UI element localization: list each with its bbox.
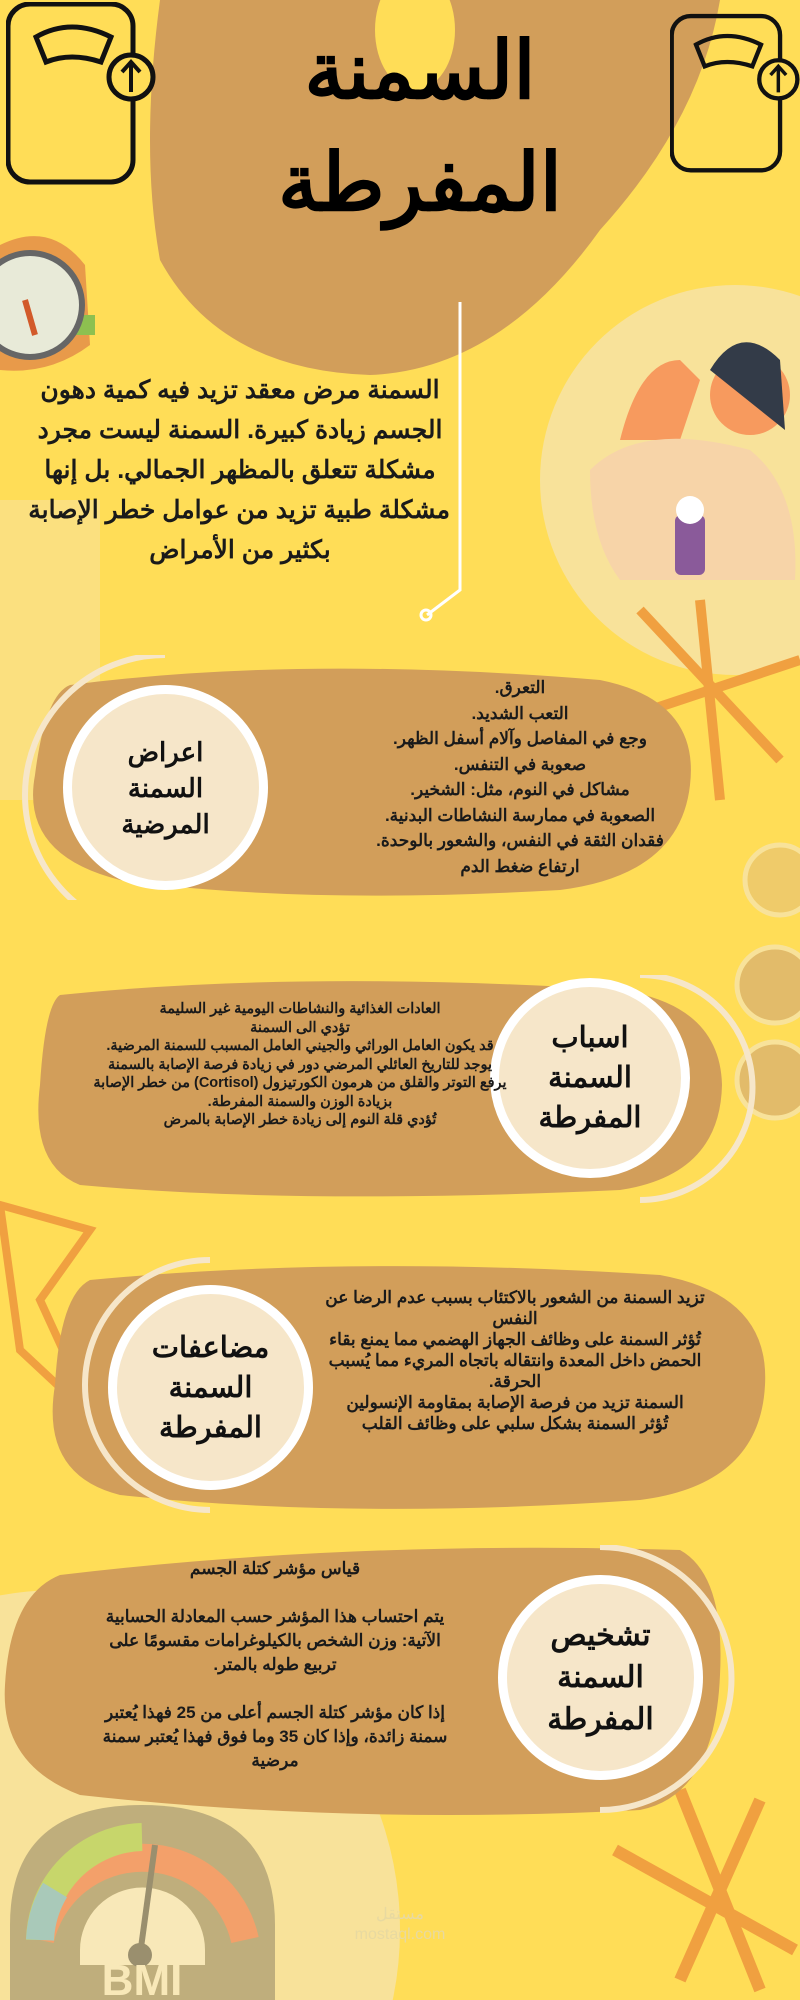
- circle: complications heading: المفرطة: [159, 1412, 262, 1444]
- icon: burger gauge: [0, 236, 95, 371]
- text: causes list: تؤدي الى السمنة: [250, 1020, 350, 1036]
- title: السمنة: [304, 26, 536, 115]
- text: symptoms list: ارتفاع ضغط الدم: [460, 856, 580, 876]
- title: المفرطة: [278, 138, 562, 227]
- circle: symptoms heading: [63, 685, 268, 890]
- text: symptoms list: صعوبة في التنفس.: [454, 754, 586, 774]
- circle: complications heading: [108, 1285, 313, 1490]
- text: diagnosis: إذا كان مؤشر كتلة الجسم أعلى من 25 فهذا يُعتبر: [105, 1703, 445, 1722]
- text: symptoms list: الصعوبة في ممارسة النشاطات البدنية.: [385, 806, 655, 824]
- text: causes list: بزيادة الوزن والسمنة المفرطة.: [208, 1094, 392, 1110]
- text: complications list: الحرقة.: [489, 1372, 541, 1391]
- text: causes list: [93, 1001, 507, 1128]
- text: diagnosis: تربيع طوله بالمتر.: [213, 1655, 337, 1674]
- circle: causes heading: [490, 978, 690, 1178]
- circle: causes heading: المفرطة: [539, 1102, 641, 1134]
- watermark: mostaql.com: [355, 1926, 445, 1943]
- text: symptoms list: التعب الشديد.: [471, 704, 569, 722]
- intro text: بكثير من الأمراض: [149, 536, 331, 564]
- text: causes list: قد يكون العامل الوراثي والجيني العامل المسبب للسمنة المرضية.: [106, 1038, 494, 1054]
- text: complications list: الحمض داخل المعدة وانتقاله باتجاه المريء مما يُسبب: [329, 1351, 701, 1370]
- connector line: [420, 302, 462, 622]
- circle: complications heading: مضاعفات: [152, 1332, 269, 1364]
- text: complications list: النفس: [492, 1309, 538, 1328]
- text: diagnosis: الآتية: وزن الشخص بالكيلوغرامات مقسومًا على: [109, 1631, 441, 1650]
- intro text: الجسم زيادة كبيرة. السمنة ليست مجرد: [38, 416, 442, 444]
- panel: diagnosis: [4, 1545, 734, 1815]
- circle: complications heading: السمنة: [169, 1372, 252, 1404]
- icon: BMI gauge: [10, 1805, 275, 2000]
- panel: symptoms: [22, 655, 691, 900]
- circle: diagnosis heading: [498, 1575, 703, 1780]
- text: diagnosis: سمنة زائدة، وإذا كان 35 وما فوق فهذا يُعتبر سمنة: [103, 1727, 447, 1746]
- icon: scale left: [6, 2, 156, 184]
- title: [278, 26, 562, 231]
- text: causes list: العادات الغذائية والنشاطات اليومية غير السليمة: [159, 1001, 441, 1017]
- text: diagnosis: مرضية: [251, 1751, 299, 1770]
- text: complications list: [325, 1288, 705, 1434]
- panel: causes: [38, 975, 756, 1203]
- text: symptoms list: [376, 678, 664, 876]
- circle: diagnosis heading: السمنة: [557, 1660, 644, 1694]
- circle: symptoms heading: اعراض: [128, 736, 203, 766]
- text: symptoms list: وجع في المفاصل وآلام أسفل الظهر.: [393, 729, 647, 748]
- panel: complications: [52, 1257, 766, 1513]
- circle: symptoms heading: السمنة: [128, 772, 203, 802]
- circle: symptoms heading: المرضية: [121, 808, 210, 838]
- text: complications list: تزيد السمنة من الشعور بالاكتئاب بسبب عدم الرضا عن: [325, 1288, 705, 1307]
- illustration: man eating: [590, 342, 796, 580]
- text: complications list: تُؤثر السمنة بشكل سلبي على وظائف القلب: [362, 1414, 668, 1433]
- circle: diagnosis heading: المفرطة: [547, 1702, 654, 1736]
- text: diagnosis: [103, 1559, 447, 1770]
- text: complications list: تُؤثر السمنة على وظائف الجهاز الهضمي مما يمنع بقاء: [329, 1330, 701, 1349]
- text: symptoms list: التعرق.: [495, 678, 545, 697]
- text: symptoms list: مشاكل في النوم، مثل: الشخير.: [410, 780, 630, 799]
- intro text: السمنة مرض معقد تزيد فيه كمية دهون: [40, 376, 440, 404]
- circle: causes heading: السمنة: [548, 1062, 632, 1094]
- icon: scale right: [670, 14, 800, 172]
- text: complications list: السمنة تزيد من فرصة الإصابة بمقاومة الإنسولين: [346, 1393, 684, 1412]
- text: causes list: يرفع التوتر والقلق من هرمون الكورتيزول (Cortisol) من خطر الإصابة: [93, 1075, 507, 1091]
- text: diagnosis: قياس مؤشر كتلة الجسم: [190, 1559, 360, 1578]
- text: diagnosis: يتم احتساب هذا المؤشر حسب المعادلة الحسابية: [106, 1607, 444, 1626]
- intro text: [28, 376, 450, 564]
- intro text: مشكلة طبية تزيد من عوامل خطر الإصابة: [28, 496, 450, 524]
- watermark: [355, 1906, 445, 1943]
- text: causes list: تُؤدي قلة النوم إلى زيادة خطر الإصابة بالمرض: [164, 1112, 436, 1128]
- circle: diagnosis heading: تشخيص: [550, 1618, 651, 1652]
- circle: causes heading: اسباب: [551, 1022, 629, 1054]
- watermark: مستقل: [376, 1906, 424, 1923]
- text: symptoms list: فقدان الثقة في النفس، والشعور بالوحدة.: [376, 831, 664, 850]
- text: causes list: يوجد للتاريخ العائلي المرضي دور في زيادة فرصة الإصابة بالسمنة: [108, 1056, 492, 1072]
- intro text: مشكلة تتعلق بالمظهر الجمالي. بل إنها: [44, 456, 436, 484]
